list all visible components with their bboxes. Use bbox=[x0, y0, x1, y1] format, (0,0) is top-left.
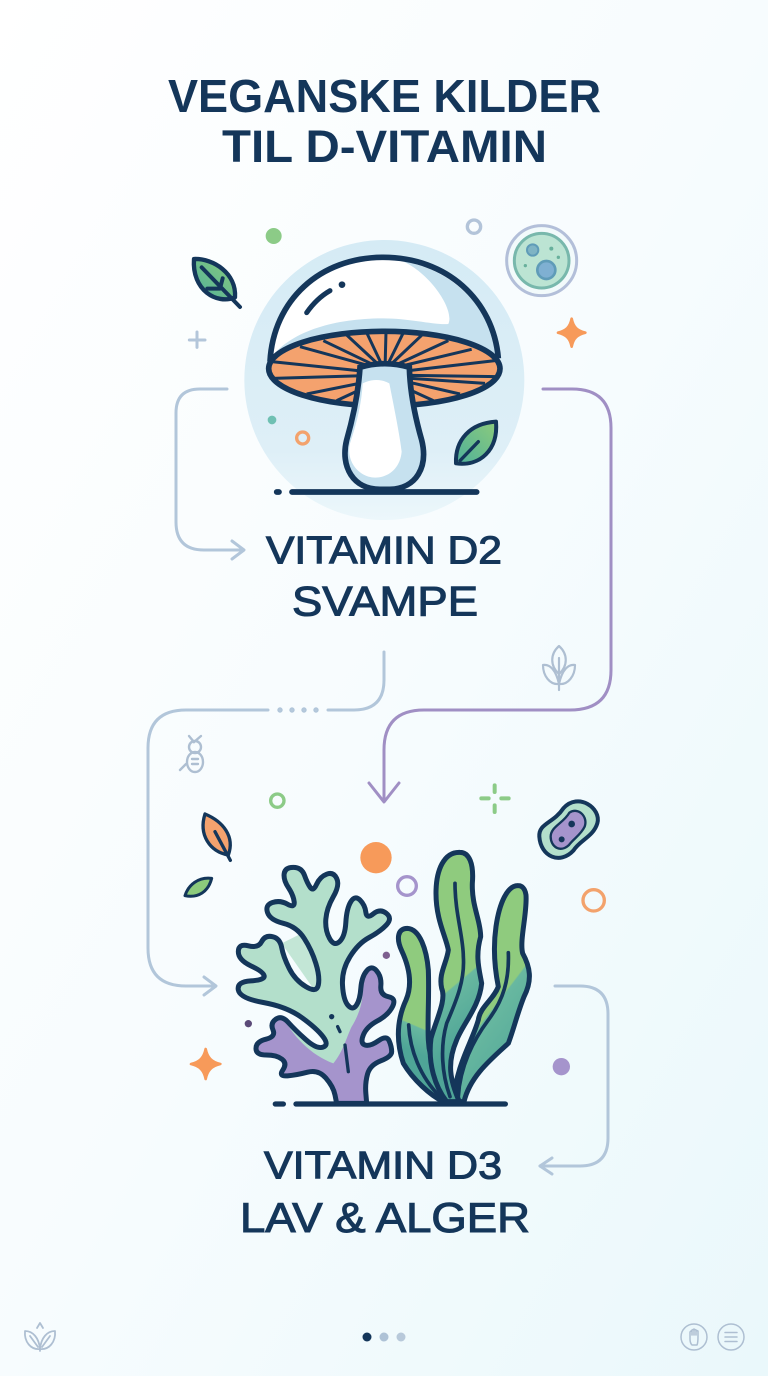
connector arrow: mushroom to algae bbox=[369, 389, 611, 802]
icon: orange leaf bbox=[203, 814, 230, 860]
label: vitamin D2 svampe: VITAMIN D2 bbox=[266, 530, 502, 572]
pagination dots bbox=[362, 1332, 406, 1342]
connector arrow: svampe to lichen bbox=[148, 652, 384, 995]
connector arrow: algae to vitamin D3 label bbox=[540, 986, 608, 1174]
connector arrow: mushroom to vitamin D2 label bbox=[176, 389, 244, 559]
mushroom stem bbox=[345, 364, 424, 489]
illustration: mushroom scene bbox=[189, 220, 585, 520]
mushroom cap bbox=[270, 257, 498, 362]
ground line bbox=[275, 1096, 505, 1112]
illustration: lichen and algae scene bbox=[185, 785, 604, 1108]
label: vitamin D3 lav og alger bbox=[240, 1144, 530, 1241]
icon: bean cell bbox=[539, 801, 598, 858]
icon: small DNA figure outline bbox=[180, 736, 203, 772]
background circle bbox=[244, 240, 524, 520]
label: vitamin D3 lav og alger: LAV & ALGER bbox=[240, 1194, 530, 1241]
icon: cell bbox=[507, 226, 577, 296]
ground line bbox=[277, 483, 477, 500]
icon: leaf top left bbox=[194, 259, 240, 307]
icon: sprout outline bbox=[543, 646, 575, 690]
label: vitamin D2 svampe: SVAMPE bbox=[292, 578, 478, 624]
label: vitamin D2 svampe bbox=[266, 530, 502, 624]
label: vitamin D3 lav og alger: VITAMIN D3 bbox=[264, 1144, 502, 1188]
mushroom gills bbox=[269, 331, 500, 406]
footer icon: leaf logo bbox=[25, 1323, 55, 1351]
decorative dots and sparkles bbox=[191, 785, 604, 1079]
decorative dots and sparkles bbox=[189, 220, 585, 444]
lichen bbox=[238, 867, 403, 1108]
icon: leaf right bbox=[456, 422, 496, 464]
title: TIL D-VITAMIN bbox=[222, 121, 547, 172]
title bbox=[168, 70, 601, 172]
kelp leaves bbox=[398, 852, 529, 1102]
icon: small green leaf bbox=[185, 878, 212, 896]
footer icon: menu button bbox=[718, 1324, 744, 1350]
title: VEGANSKE KILDER bbox=[168, 70, 601, 122]
footer icon: hand button bbox=[681, 1324, 707, 1350]
